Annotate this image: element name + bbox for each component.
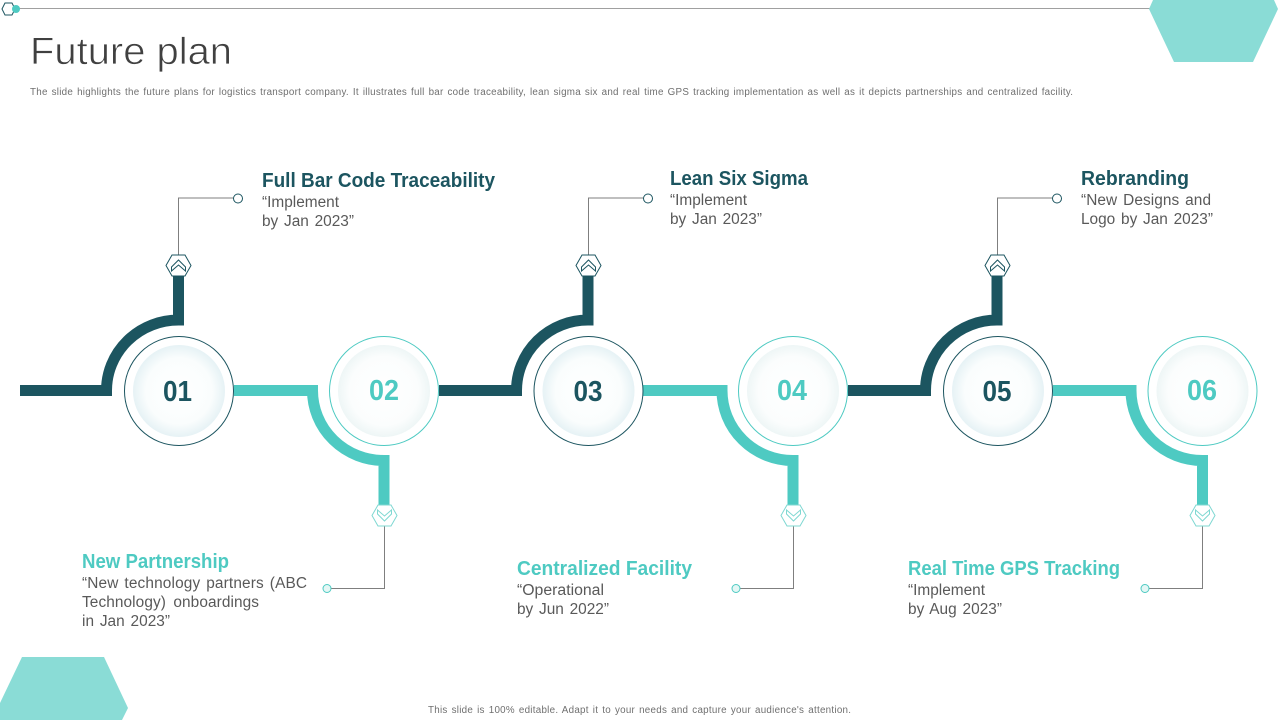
footer note: This slide is 100% editable. Adapt it to your needs and capture your audience's attention. xyxy=(428,705,851,716)
step 05 connector xyxy=(848,276,997,390)
title: Future plan xyxy=(30,31,232,73)
text: Centralized Facility: “Operational xyxy=(517,582,604,599)
node 02 xyxy=(330,336,438,446)
text: Real Time GPS Tracking: by Aug 2023” xyxy=(908,601,1002,618)
top rule xyxy=(18,8,1150,10)
text: Full Bar Code Traceability: Full Bar Code Traceability xyxy=(262,170,496,192)
text: Lean Six Sigma xyxy=(670,168,809,228)
leader 03 with up-arrow hexagon xyxy=(576,194,652,276)
top-right hexagon xyxy=(1149,0,1278,62)
text: Real Time GPS Tracking: Real Time GPS Tracking xyxy=(908,558,1120,580)
text: New Partnership: “New technology partners (ABC xyxy=(82,575,307,592)
leader 05 with up-arrow hexagon xyxy=(985,194,1062,276)
text: Full Bar Code Traceability xyxy=(262,170,496,230)
leader 04 with down-arrow hexagon xyxy=(732,505,806,592)
node 06: 06 xyxy=(1187,375,1217,407)
step 01 connector xyxy=(20,276,178,390)
text: Centralized Facility: Centralized Facility xyxy=(517,558,693,580)
step 04 connector xyxy=(643,390,793,505)
text: New Partnership: in Jan 2023” xyxy=(82,613,170,630)
text: New Partnership: Technology) onboardings xyxy=(82,594,259,611)
node 05 xyxy=(944,336,1052,446)
icon: top-left hexagon marker xyxy=(2,3,20,15)
text: Lean Six Sigma: Lean Six Sigma xyxy=(670,168,809,190)
text: Lean Six Sigma: “Implement xyxy=(670,192,748,209)
text: Rebranding: Logo by Jan 2023” xyxy=(1081,211,1213,228)
text: Centralized Facility: by Jun 2022” xyxy=(517,601,609,618)
node 01 xyxy=(124,336,234,446)
leader 06 with down-arrow hexagon xyxy=(1141,505,1215,592)
text: Full Bar Code Traceability: “Implement xyxy=(262,194,340,211)
text: Real Time GPS Tracking xyxy=(908,558,1120,618)
step 06 connector xyxy=(1053,390,1202,505)
text: Real Time GPS Tracking: “Implement xyxy=(908,582,986,599)
text: Rebranding: Rebranding xyxy=(1081,168,1189,190)
node 05: 05 xyxy=(982,376,1012,408)
bottom-left hexagon xyxy=(0,657,128,720)
node 02: 02 xyxy=(369,375,399,407)
text: Centralized Facility xyxy=(517,558,693,618)
text: Rebranding xyxy=(1081,168,1213,228)
node 03: 03 xyxy=(574,376,602,408)
node 03 xyxy=(534,336,643,446)
text: Full Bar Code Traceability: by Jan 2023” xyxy=(262,213,354,230)
step 03 connector xyxy=(439,276,588,390)
text: New Partnership: New Partnership xyxy=(82,551,229,573)
step 02 connector xyxy=(234,390,384,505)
leader 02 with down-arrow hexagon xyxy=(323,505,397,592)
text: New Partnership xyxy=(82,551,307,630)
text: Rebranding: “New Designs and xyxy=(1081,192,1211,209)
text: Lean Six Sigma: by Jan 2023” xyxy=(670,211,762,228)
node 04: 04 xyxy=(777,375,807,407)
node 04 xyxy=(738,336,848,446)
node 01: 01 xyxy=(163,376,192,408)
leader 01 with up-arrow hexagon xyxy=(166,194,242,276)
description: The slide highlights the future plans for logistics transport company. It illustrates full bar code traceability, lean sigma six and real time GPS tracking implementation as well as it depicts partnerships and centralized facility. xyxy=(30,87,1073,98)
node 06 xyxy=(1148,336,1257,446)
